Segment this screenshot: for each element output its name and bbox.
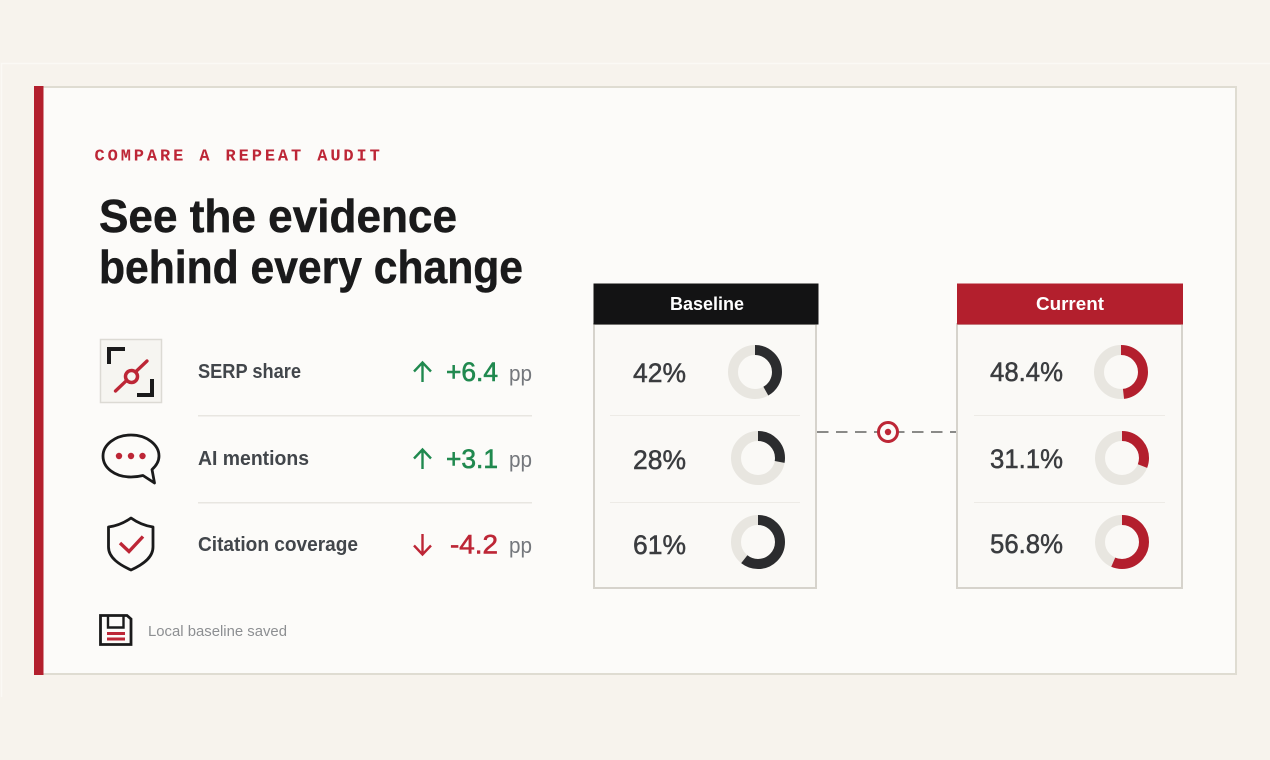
row: SERP share: SERP share <box>198 361 301 383</box>
icon: target <box>878 422 898 442</box>
connector <box>817 422 957 442</box>
donut 31.1% <box>1100 436 1144 480</box>
row: SERP share <box>198 357 532 387</box>
value 61%: 61% <box>633 530 686 560</box>
title: behind every change <box>99 241 523 293</box>
row: AI mentions: pp <box>509 447 532 472</box>
row: Citation coverage: -4.2 <box>450 530 498 560</box>
header: current: Current <box>1036 294 1104 314</box>
value 28%: 28% <box>633 445 686 475</box>
icon: shield check <box>108 518 153 570</box>
icon: SERP share focus frame <box>100 340 162 402</box>
accent bar <box>34 86 44 675</box>
value 56.8%: 56.8% <box>990 529 1063 559</box>
row: Citation coverage: pp <box>509 533 532 558</box>
footnote: Local baseline saved <box>148 623 287 640</box>
donut 48.4% <box>1099 350 1143 394</box>
row: AI mentions: AI mentions <box>198 448 309 470</box>
header: baseline: Baseline <box>670 294 744 314</box>
donut 28% <box>736 436 780 480</box>
eyebrow: COMPARE A REPEAT AUDIT <box>94 148 383 166</box>
header: baseline <box>594 284 818 324</box>
row: SERP share: pp <box>509 361 532 386</box>
title: See the evidence <box>99 190 457 242</box>
header: current <box>957 284 1183 324</box>
panel: main card <box>34 86 1236 675</box>
donut 61% <box>736 520 780 564</box>
row: AI mentions: +3.1 <box>446 444 498 474</box>
row: Citation coverage <box>198 530 532 560</box>
value 48.4%: 48.4% <box>990 357 1063 387</box>
donut 56.8% <box>1100 520 1144 564</box>
icon: speech bubble <box>103 435 159 483</box>
value 42%: 42% <box>633 358 686 388</box>
row: AI mentions <box>198 444 532 474</box>
donut 42% <box>733 350 777 394</box>
panel: baseline <box>594 284 818 588</box>
row: Citation coverage: Citation coverage <box>198 534 358 556</box>
value 31.1%: 31.1% <box>990 444 1063 474</box>
arrow up <box>414 450 431 469</box>
arrow up <box>414 362 431 382</box>
row: SERP share: +6.4 <box>446 357 498 387</box>
title <box>99 190 523 293</box>
icon: floppy disk <box>100 616 131 644</box>
arrow down <box>414 534 431 554</box>
panel: current <box>957 284 1183 588</box>
